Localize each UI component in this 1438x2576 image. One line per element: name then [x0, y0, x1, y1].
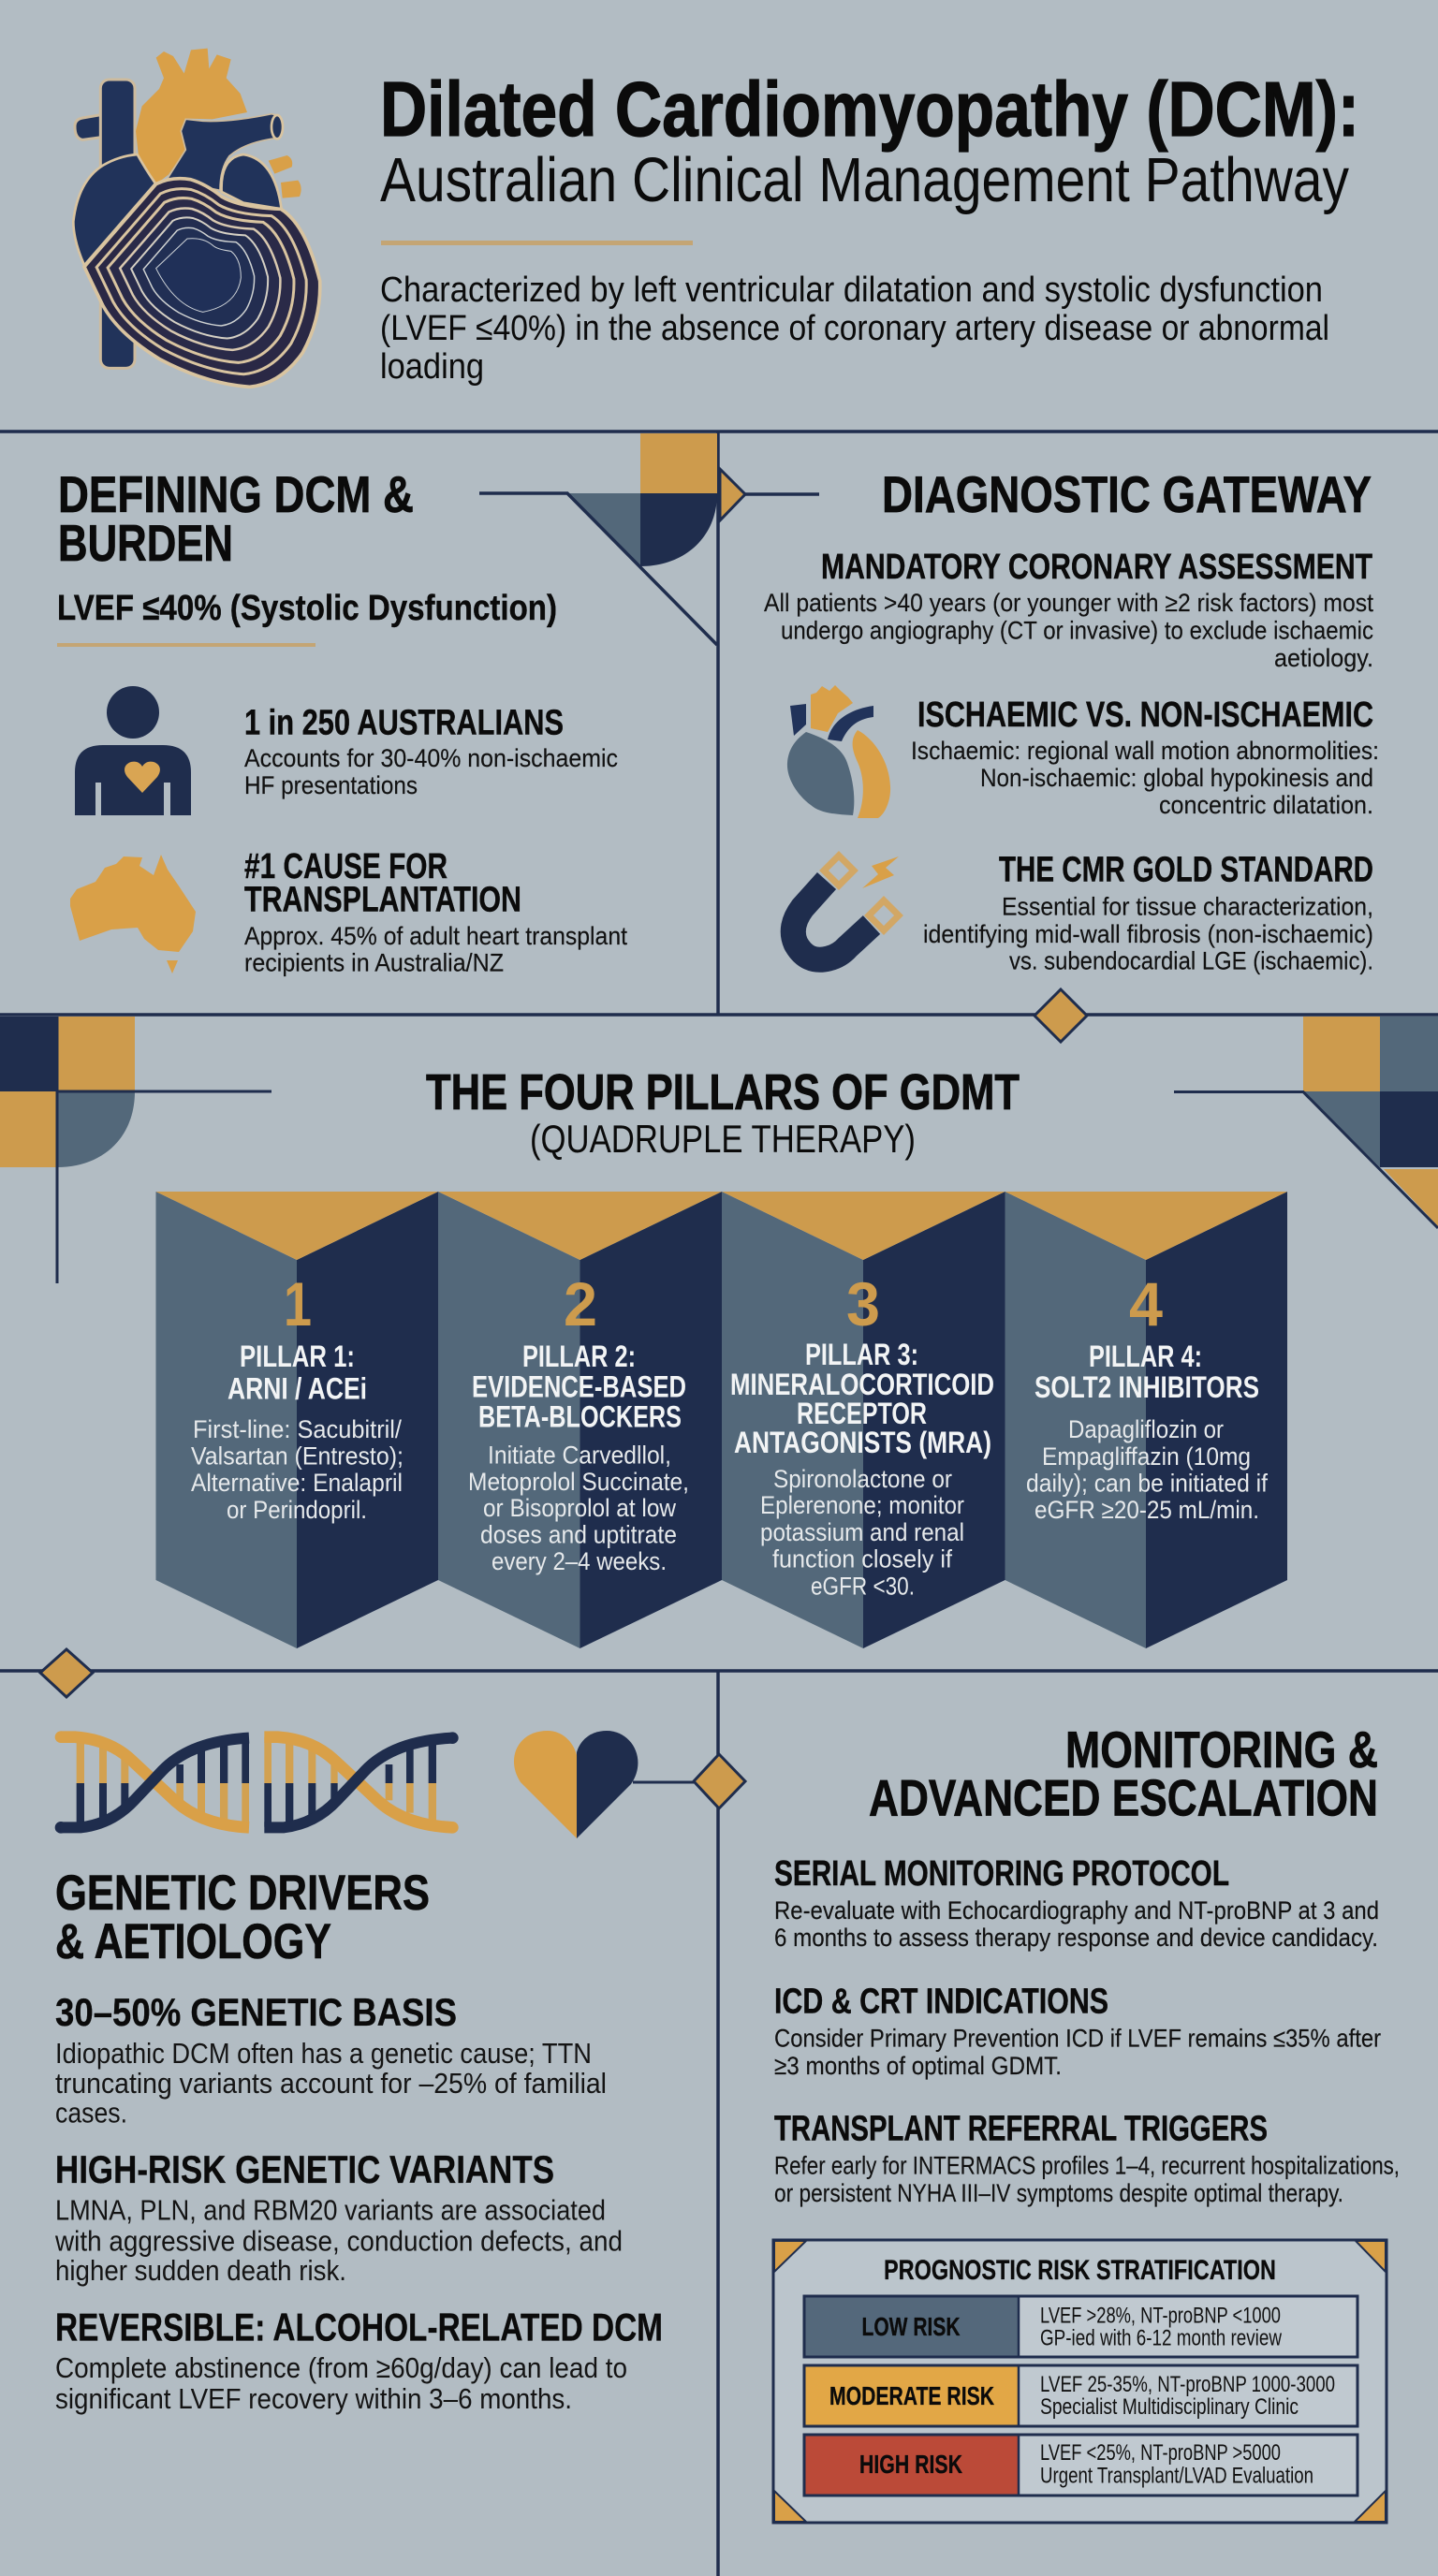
pillar 1: First-line: Sacubitril/ [193, 1415, 402, 1443]
icon: Australia map [70, 855, 196, 973]
pillar 2: every 2–4 weeks. [492, 1547, 667, 1575]
pillar 4: Dapagliflozin or [1068, 1415, 1224, 1443]
stat: 1 in 250: HF presentations [244, 771, 418, 799]
block: CMR gold standard: Essential for tissue characterization, [1002, 893, 1373, 921]
pillar 1: Valsartan (Entresto); [191, 1442, 404, 1470]
icon: split heart [514, 1731, 638, 1838]
stat: transplantation: recipients in Australia/NZ [244, 949, 504, 977]
pillar 1: 1 [284, 1269, 312, 1339]
icon: heart [787, 685, 890, 818]
pillar 1: ARNI / ACEi [227, 1372, 367, 1406]
corner accents [774, 2241, 1386, 2522]
block: transplant referral: or persistent NYHA III–IV symptoms despite optimal therapy. [774, 2179, 1343, 2207]
diamond marker [40, 1649, 93, 1697]
pillar 4 [1005, 1192, 1287, 1648]
row: low risk: LVEF >28%, NT-proBNP <1000 [1040, 2303, 1281, 2329]
row: low risk: LOW RISK [861, 2312, 961, 2341]
row: moderate risk: LVEF 25-35%, NT-proBNP 1000-3000 [1040, 2372, 1335, 2397]
decorative corner: center junction [479, 433, 819, 645]
pillar 2: or Bisoprolol at low [483, 1494, 676, 1522]
block: genetic basis: Idiopathic DCM often has a genetic cause; TTN [55, 2037, 592, 2070]
pillar 3: Eplerenone; monitor [760, 1491, 964, 1519]
panel: prognostic risk stratification [773, 2240, 1387, 2523]
row: low risk [804, 2296, 1357, 2357]
decorative corner: top left of pillars [0, 1017, 271, 1283]
pillar 4: 4 [1129, 1269, 1163, 1339]
heading [55, 1866, 430, 1969]
block: mandatory coronary assessment [764, 548, 1373, 672]
block: high-risk variants: HIGH-RISK GENETIC VARIANTS [55, 2147, 554, 2191]
block: serial monitoring: Re-evaluate with Echocardiography and NT-proBNP at 3 and [774, 1896, 1379, 1925]
header panel [73, 49, 1359, 387]
row: moderate risk: MODERATE RISK [829, 2381, 994, 2410]
pillar 3: ANTAGONISTS (MRA) [734, 1426, 991, 1459]
pillar 3 [722, 1192, 1005, 1648]
pillar 3: function closely if [772, 1544, 952, 1573]
block: serial monitoring: 6 months to assess therapy response and device candidacy. [774, 1924, 1378, 1952]
stat: 1 in 250: Accounts for 30-40% non-ischaemic [244, 744, 618, 772]
heading: DEFINING DCM & [58, 465, 414, 523]
block: CMR gold standard [923, 850, 1373, 975]
block: ischaemic vs non-ischaemic: Ischaemic: regional wall motion abnormolities: [911, 737, 1379, 765]
icon: anatomical heart with concentric rings [73, 49, 320, 387]
pillar 3: PILLAR 3: [805, 1338, 918, 1371]
row: moderate risk: Specialist Multidisciplinary Clinic [1040, 2394, 1299, 2420]
panel: monitoring and advanced escalation [773, 1720, 1400, 2523]
description: (LVEF ≤40%) in the absence of coronary artery disease or abnormal [380, 309, 1329, 348]
description: loading [380, 347, 484, 387]
heading: GENETIC DRIVERS [55, 1866, 430, 1921]
panel: diagnostic gateway [764, 465, 1379, 975]
gold rule [57, 643, 315, 647]
block: mandatory coronary assessment: undergo angiography (CT or invasive) to exclude ischaemic [781, 616, 1373, 644]
block: alcohol-related: REVERSIBLE: ALCOHOL-RELATED DCM [55, 2305, 663, 2349]
stat: transplantation: Approx. 45% of adult heart transplant [244, 922, 627, 950]
block: high-risk variants [54, 2147, 623, 2287]
pillar 2: 2 [564, 1269, 597, 1339]
stat: 1 in 250: 1 in 250 AUSTRALIANS [244, 704, 564, 743]
pillar 2: BETA-BLOCKERS [478, 1400, 682, 1434]
pillar 3: potassium and renal [760, 1518, 964, 1546]
pillar 2: doses and uptitrate [480, 1520, 677, 1548]
heading [869, 1720, 1378, 1827]
pillar 2: EVIDENCE-BASED [472, 1370, 686, 1404]
diamond marker [1034, 989, 1087, 1042]
panel: four pillars [155, 1064, 1287, 1648]
block: ischaemic vs non-ischaemic: Non-ischaemic: global hypokinesis and [980, 764, 1373, 792]
pillar 2 [438, 1192, 722, 1648]
pillar 3: MINERALOCORTICOID [730, 1368, 994, 1401]
title [380, 66, 1359, 215]
block: ischaemic vs non-ischaemic: concentric dilatation. [1159, 791, 1373, 819]
block: high-risk variants: LMNA, PLN, and RBM20 variants are associated [55, 2194, 606, 2226]
description: Characterized by left ventricular dilatation and systolic dysfunction [380, 271, 1323, 310]
stat: transplantation [244, 847, 627, 977]
pillar 4: SOLT2 INHIBITORS [1034, 1370, 1259, 1404]
block: high-risk variants: higher sudden death risk. [55, 2254, 346, 2287]
panel: genetic drivers and aetiology [54, 1731, 745, 2415]
block: genetic basis: cases. [55, 2097, 127, 2129]
pillar 4: daily); can be initiated if [1026, 1470, 1268, 1498]
pillar 2: Metoprolol Succinate, [468, 1468, 689, 1496]
block: ICD and CRT [774, 1983, 1381, 2080]
block: mandatory coronary assessment: All patients >40 years (or younger with ≥2 risk factors) most [764, 589, 1373, 617]
pillar 3: eGFR <30. [811, 1573, 915, 1601]
block: transplant referral: TRANSPLANT REFERRAL TRIGGERS [774, 2110, 1268, 2149]
panel: defining DCM and burden [57, 465, 627, 977]
block: genetic basis [55, 1990, 607, 2129]
pillar 1: PILLAR 1: [240, 1339, 355, 1373]
stat: transplantation: TRANSPLANTATION [244, 880, 521, 919]
pillar 2: Initiate Carvedllol, [488, 1442, 671, 1470]
gold title rule [381, 241, 693, 245]
pillar 3: Spironolactone or [773, 1465, 952, 1493]
block: alcohol-related [55, 2305, 663, 2415]
block: genetic basis: 30–50% GENETIC BASIS [55, 1990, 457, 2034]
block: high-risk variants: with aggressive disease, conduction defects, and [54, 2224, 623, 2258]
block: ICD and CRT: ICD & CRT INDICATIONS [774, 1983, 1108, 2022]
row: high risk: LVEF <25%, NT-proBNP >5000 [1040, 2440, 1281, 2466]
pillar 1: or Perindopril. [227, 1496, 367, 1524]
block: ischaemic vs non-ischaemic [911, 695, 1379, 819]
block: alcohol-related: significant LVEF recovery within 3–6 months. [55, 2382, 572, 2415]
icon: person with heart [75, 686, 191, 815]
decorative corner: top right of pillars [1174, 1017, 1438, 1228]
block: alcohol-related: Complete abstinence (from ≥60g/day) can lead to [55, 2351, 627, 2384]
block: genetic basis: truncating variants account for –25% of familial [55, 2067, 607, 2100]
LVEF subheading: LVEF ≤40% (Systolic Dysfunction) [57, 589, 557, 628]
row: high risk [804, 2435, 1357, 2496]
block: CMR gold standard: identifying mid-wall fibrosis (non-ischaemic) [923, 920, 1373, 948]
pillar 2: PILLAR 2: [522, 1339, 636, 1373]
icon: DNA double helix [55, 1731, 459, 1834]
block: serial monitoring [774, 1854, 1379, 1952]
row: high risk: Urgent Transplant/LVAD Evaluation [1040, 2464, 1313, 2488]
block: serial monitoring: SERIAL MONITORING PROTOCOL [774, 1854, 1229, 1894]
pillar 1: Alternative: Enalapril [191, 1469, 403, 1497]
stat: transplantation: #1 CAUSE FOR [244, 847, 448, 886]
pillar 3: 3 [846, 1269, 880, 1339]
pillar 1 [155, 1192, 438, 1648]
row: low risk: GP-ied with 6-12 month review [1040, 2325, 1283, 2351]
row: moderate risk [804, 2365, 1357, 2426]
table heading: PROGNOSTIC RISK STRATIFICATION [884, 2255, 1276, 2286]
pillar 4: PILLAR 4: [1089, 1339, 1202, 1373]
connector and diamond [633, 1754, 745, 1808]
heading: & AETIOLOGY [55, 1914, 331, 1969]
pillar 4: Empagliffazin (10mg [1042, 1442, 1251, 1471]
row: high risk: HIGH RISK [859, 2450, 962, 2479]
heading [58, 465, 414, 572]
pillar 4: eGFR ≥20-25 mL/min. [1034, 1496, 1259, 1524]
block: ICD and CRT: ≥3 months of optimal GDMT. [774, 2052, 1062, 2080]
heading: (QUADRUPLE THERAPY) [530, 1117, 916, 1161]
block: transplant referral [774, 2110, 1400, 2207]
description [380, 271, 1329, 387]
heading [426, 1064, 1020, 1161]
heading: THE FOUR PILLARS OF GDMT [426, 1064, 1020, 1120]
heading: BURDEN [58, 514, 233, 572]
pillar 3: RECEPTOR [797, 1397, 927, 1430]
stat: 1 in 250 [244, 704, 618, 799]
icon: magnet [793, 856, 899, 959]
block: mandatory coronary assessment: aetiology. [1274, 644, 1373, 672]
block: CMR gold standard: vs. subendocardial LGE (ischaemic). [1009, 947, 1373, 975]
